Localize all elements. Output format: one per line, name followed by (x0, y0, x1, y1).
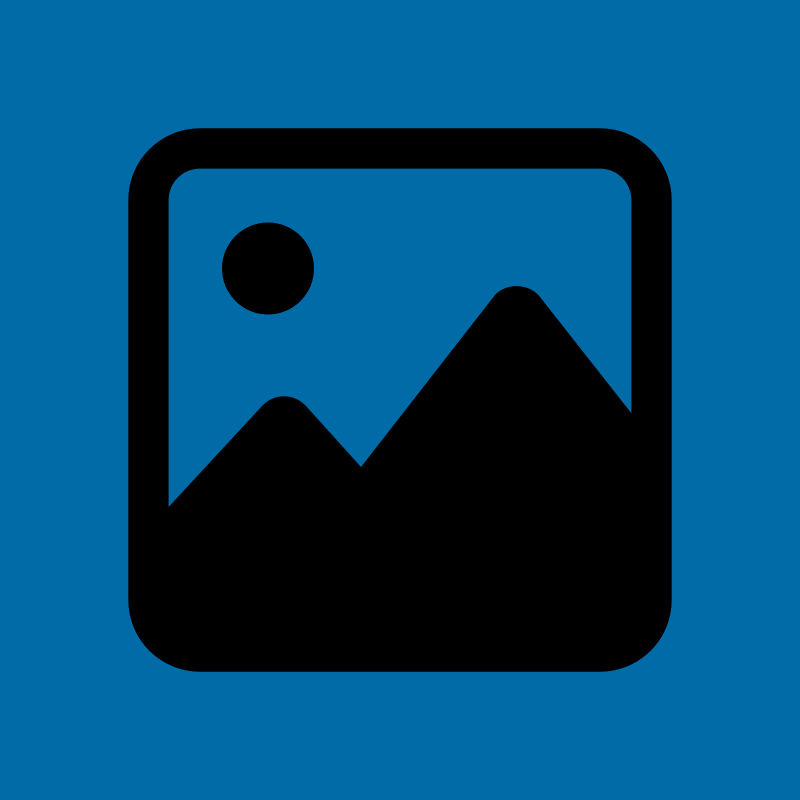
icon: image placeholder (128, 128, 672, 672)
icon: sun (222, 222, 314, 314)
icon frame with mountains (128, 128, 672, 672)
